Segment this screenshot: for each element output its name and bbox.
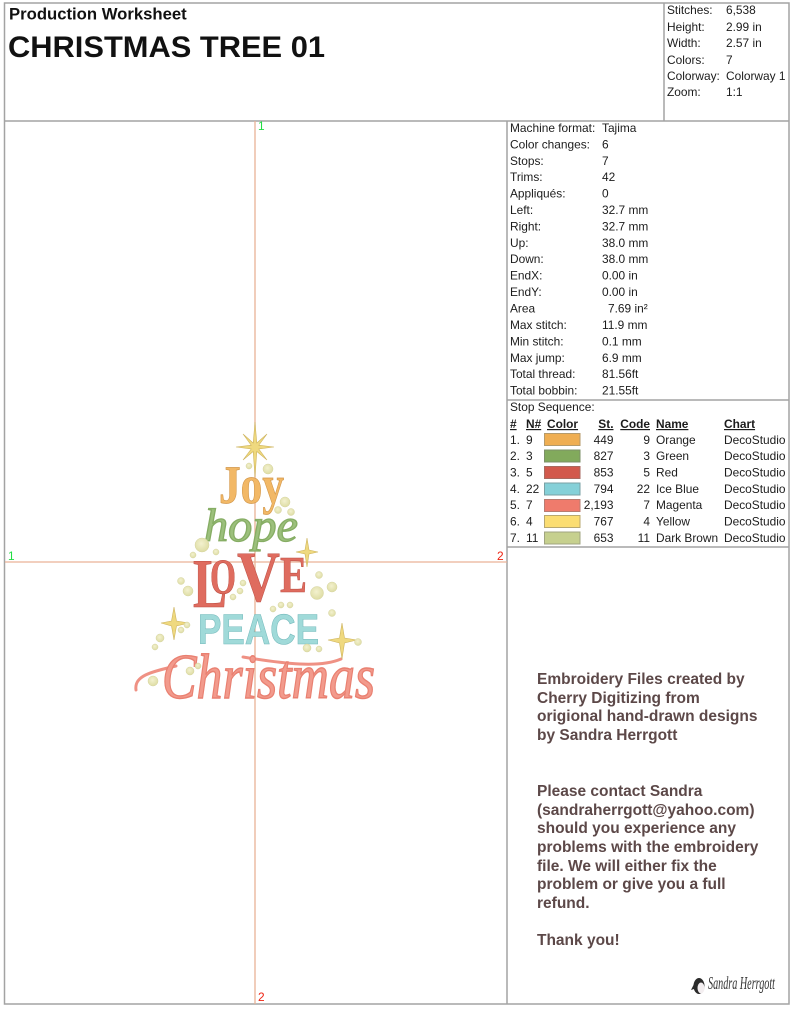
row 1 orange: 9 bbox=[643, 433, 650, 447]
machine details: Machine format: bbox=[510, 121, 595, 135]
crosshair guides: 2 bbox=[497, 549, 504, 563]
table header: N# bbox=[526, 417, 542, 431]
signature logo bbox=[691, 973, 776, 994]
table header: Code bbox=[620, 417, 650, 431]
machine details: Min stitch: bbox=[510, 334, 564, 348]
row 5 magenta: DecoStudio bbox=[724, 498, 786, 512]
machine details: Tajima bbox=[602, 121, 637, 135]
summary stats: Zoom: bbox=[667, 85, 701, 99]
summary stats bbox=[667, 3, 786, 99]
summary stats: Colorway 1 bbox=[726, 69, 786, 83]
row 2 green: DecoStudio bbox=[724, 449, 786, 463]
row 5 magenta: 2,193 bbox=[584, 498, 614, 512]
row 2 green: Green bbox=[656, 449, 689, 463]
row 1 orange: 9 bbox=[526, 433, 533, 447]
row 4 ice blue: 4. bbox=[510, 482, 520, 496]
table header: Color bbox=[547, 417, 578, 431]
embroidered christmas tree design bbox=[136, 422, 375, 712]
row 3 red: 5 bbox=[643, 466, 650, 480]
summary stats: Height: bbox=[667, 20, 705, 34]
machine details: 32.7 mm bbox=[602, 220, 648, 234]
row 4 ice blue bbox=[510, 482, 786, 496]
summary stats: 7 bbox=[726, 53, 733, 67]
row 1 orange: 449 bbox=[594, 433, 614, 447]
credits note: problems with the embroidery bbox=[537, 839, 759, 856]
credits note: file. We will either fix the bbox=[537, 858, 717, 875]
table header: Name bbox=[656, 417, 689, 431]
machine details: 81.56ft bbox=[602, 367, 639, 381]
machine details: 7 bbox=[602, 154, 609, 168]
machine details: Trims: bbox=[510, 170, 543, 184]
row 5 magenta bbox=[510, 498, 786, 512]
machine details: Max jump: bbox=[510, 351, 565, 365]
row 4 ice blue: Ice Blue bbox=[656, 482, 699, 496]
icon: top star bbox=[236, 422, 274, 477]
credits note: origional hand-drawn designs bbox=[537, 708, 757, 725]
row 3 red: DecoStudio bbox=[724, 466, 786, 480]
row 2 green: 2. bbox=[510, 449, 520, 463]
machine details: Appliqués: bbox=[510, 186, 566, 200]
crosshair guides: 1 bbox=[258, 119, 265, 133]
icon: sparkle stars bbox=[161, 538, 357, 659]
machine details: 38.0 mm bbox=[602, 236, 648, 250]
machine details: Total thread: bbox=[510, 367, 575, 381]
machine details: Down: bbox=[510, 252, 544, 266]
title block: Production Worksheet bbox=[9, 4, 187, 24]
machine details: EndX: bbox=[510, 268, 542, 282]
credits note: refund. bbox=[537, 895, 590, 912]
machine details: 0 bbox=[602, 186, 609, 200]
machine details: Area bbox=[510, 302, 536, 316]
row 4 ice blue: 794 bbox=[594, 482, 614, 496]
table header bbox=[510, 417, 755, 431]
decorative bead dots bbox=[148, 463, 362, 686]
row 2 green: 3 bbox=[643, 449, 650, 463]
row 7 dark brown: 653 bbox=[594, 531, 614, 545]
stop sequence table: Stop Sequence: bbox=[510, 400, 595, 414]
row 1 orange: Orange bbox=[656, 433, 696, 447]
title block bbox=[8, 4, 325, 64]
row 5 magenta: 7 bbox=[526, 498, 533, 512]
machine details: 21.55ft bbox=[602, 384, 639, 398]
machine details: 42 bbox=[602, 170, 616, 184]
credits note: Embroidery Files created by bbox=[537, 671, 745, 688]
row 6 yellow: Yellow bbox=[656, 514, 690, 528]
word: LOVE: E bbox=[280, 547, 307, 604]
credits note: Please contact Sandra bbox=[537, 783, 703, 800]
row 3 red bbox=[510, 466, 786, 480]
summary stats: Stitches: bbox=[667, 3, 713, 17]
word: PEACE: PEACE bbox=[198, 606, 319, 654]
summary stats: Colorway: bbox=[667, 69, 720, 83]
summary stats: 2.99 in bbox=[726, 20, 762, 34]
row 2 green: 3 bbox=[526, 449, 533, 463]
word: Joy: Joy bbox=[219, 455, 284, 515]
machine details: Stops: bbox=[510, 154, 544, 168]
word: Christmas: Christmas bbox=[162, 641, 375, 712]
machine details: Max stitch: bbox=[510, 318, 567, 332]
summary stats: 2.57 in bbox=[726, 36, 762, 50]
row 6 yellow bbox=[510, 514, 786, 528]
word: hope: hope bbox=[204, 500, 298, 552]
machine details: 7.69 in² bbox=[608, 302, 648, 316]
machine details: 0.1 mm bbox=[602, 334, 642, 348]
machine details: 6 bbox=[602, 138, 609, 152]
summary stats: Colors: bbox=[667, 53, 705, 67]
row 4 ice blue: 22 bbox=[526, 482, 540, 496]
row 7 dark brown bbox=[510, 531, 786, 545]
credits note: problem or give you a full bbox=[537, 876, 726, 893]
summary stats: Width: bbox=[667, 36, 701, 50]
row 2 green: 827 bbox=[594, 449, 614, 463]
row 7 dark brown: 11 bbox=[638, 531, 650, 545]
word: LOVE: L bbox=[193, 546, 227, 623]
word: LOVE: O bbox=[210, 548, 236, 604]
row 4 ice blue: 22 bbox=[637, 482, 650, 496]
summary stats: 6,538 bbox=[726, 3, 756, 17]
row 1 orange: DecoStudio bbox=[724, 433, 786, 447]
row 3 red: 3. bbox=[510, 466, 520, 480]
row 3 red: 5 bbox=[526, 466, 533, 480]
row 5 magenta: Magenta bbox=[656, 498, 703, 512]
credits note: by Sandra Herrgott bbox=[537, 727, 677, 744]
crosshair guides: 2 bbox=[258, 990, 265, 1004]
row 4 ice blue: DecoStudio bbox=[724, 482, 786, 496]
row 7 dark brown: 11 bbox=[526, 531, 539, 545]
summary stats: 1:1 bbox=[726, 85, 743, 99]
row 7 dark brown: Dark Brown bbox=[656, 531, 718, 545]
credits note bbox=[537, 671, 759, 949]
machine details: Left: bbox=[510, 203, 533, 217]
stop sequence table bbox=[510, 400, 786, 545]
crosshair guides: 1 bbox=[8, 549, 15, 563]
machine details: Color changes: bbox=[510, 138, 590, 152]
machine details: Up: bbox=[510, 236, 529, 250]
machine details: Right: bbox=[510, 220, 541, 234]
row 5 magenta: 5. bbox=[510, 498, 520, 512]
row 6 yellow: 4 bbox=[643, 514, 650, 528]
icon: penguin bbox=[691, 978, 704, 994]
row 3 red: Red bbox=[656, 466, 678, 480]
word: LOVE bbox=[193, 537, 307, 623]
table header: # bbox=[510, 417, 517, 431]
word: LOVE: V bbox=[237, 537, 280, 617]
machine details bbox=[510, 121, 648, 398]
machine details: 32.7 mm bbox=[602, 203, 648, 217]
row 7 dark brown: DecoStudio bbox=[724, 531, 786, 545]
machine details: Total bobbin: bbox=[510, 384, 577, 398]
table header: St. bbox=[598, 417, 614, 431]
credits note: Cherry Digitizing from bbox=[537, 690, 700, 707]
credits note: Thank you! bbox=[537, 932, 620, 949]
title block: CHRISTMAS TREE 01 bbox=[8, 31, 325, 64]
row 6 yellow: 4 bbox=[526, 514, 533, 528]
row 1 orange bbox=[510, 433, 786, 447]
credits note: (sandraherrgott@yahoo.com) bbox=[537, 802, 754, 819]
machine details: 0.00 in bbox=[602, 268, 638, 282]
row 3 red: 853 bbox=[594, 466, 614, 480]
machine details: EndY: bbox=[510, 285, 542, 299]
machine details: 11.9 mm bbox=[602, 318, 647, 332]
row 1 orange: 1. bbox=[510, 433, 520, 447]
machine details: 6.9 mm bbox=[602, 351, 642, 365]
row 2 green bbox=[510, 449, 786, 463]
row 6 yellow: DecoStudio bbox=[724, 514, 786, 528]
crosshair guides bbox=[5, 119, 507, 1004]
row 6 yellow: 6. bbox=[510, 514, 520, 528]
machine details: 38.0 mm bbox=[602, 252, 648, 266]
row 5 magenta: 7 bbox=[643, 498, 650, 512]
row 7 dark brown: 7. bbox=[510, 531, 520, 545]
machine details: 0.00 in bbox=[602, 285, 638, 299]
credits note: should you experience any bbox=[537, 820, 736, 837]
row 6 yellow: 767 bbox=[594, 514, 614, 528]
table header: Chart bbox=[724, 417, 755, 431]
